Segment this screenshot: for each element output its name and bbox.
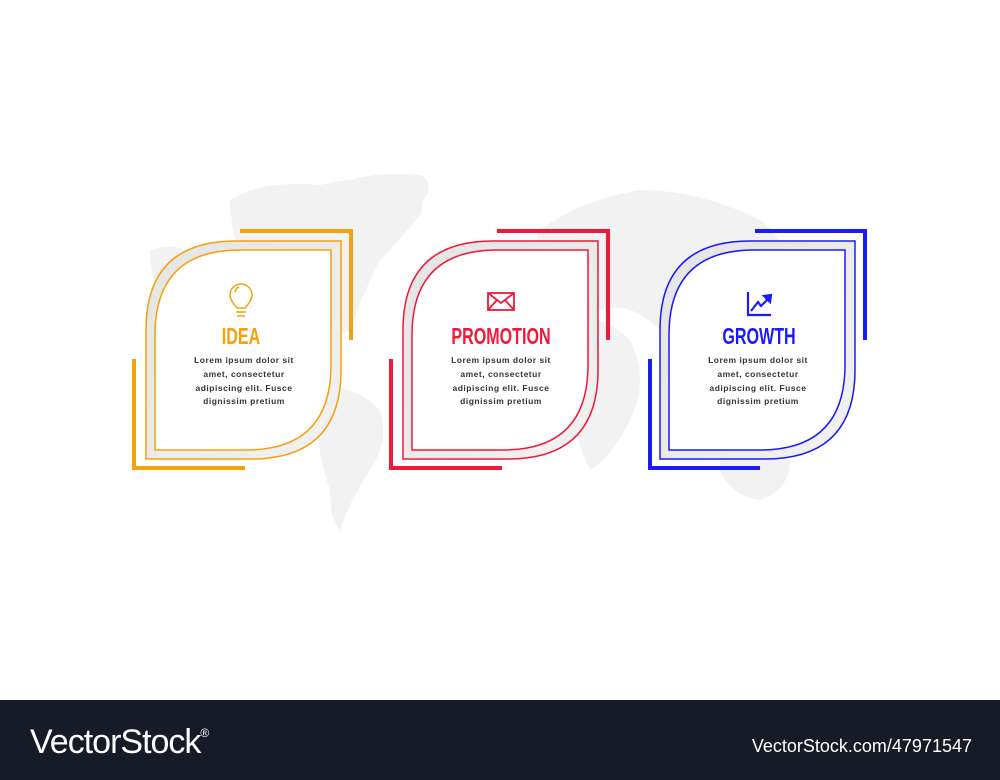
text block: Lorem ipsum dolor sit: [194, 355, 294, 365]
heading: IDEA: IDEA: [222, 324, 260, 350]
footer id: VectorStock.com/47971547: [752, 736, 972, 756]
icon: envelope: [488, 293, 514, 310]
frame brackets: [650, 231, 865, 468]
footer bar: [0, 700, 1000, 780]
card 1: idea: [134, 231, 351, 468]
frame brackets: [134, 231, 351, 468]
text block: amet, consectetur: [717, 369, 799, 379]
text block: dignissim pretium: [203, 396, 285, 406]
text block: amet, consectetur: [460, 369, 542, 379]
text block: adipiscing elit. Fusce: [710, 383, 806, 393]
text block: adipiscing elit. Fusce: [196, 383, 292, 393]
text block: Lorem ipsum dolor sit: [708, 355, 808, 365]
text block: amet, consectetur: [203, 369, 285, 379]
text block: dignissim pretium: [460, 396, 542, 406]
text block: [708, 355, 808, 406]
text block: [451, 355, 551, 406]
text block: adipiscing elit. Fusce: [453, 383, 549, 393]
footer logo: ®: [200, 726, 209, 740]
background world map: [150, 174, 790, 530]
text block: [194, 355, 294, 406]
footer logo: VectorStock: [30, 723, 200, 761]
frame brackets: [391, 231, 608, 468]
heading: PROMOTION: PROMOTION: [451, 324, 551, 350]
card 2: promotion: [391, 231, 608, 468]
icon: light bulb: [230, 284, 252, 316]
icon: growth chart: [748, 292, 771, 315]
text block: Lorem ipsum dolor sit: [451, 355, 551, 365]
heading: GROWTH: GROWTH: [722, 324, 796, 350]
card 3: growth: [650, 231, 865, 468]
text block: dignissim pretium: [717, 396, 799, 406]
